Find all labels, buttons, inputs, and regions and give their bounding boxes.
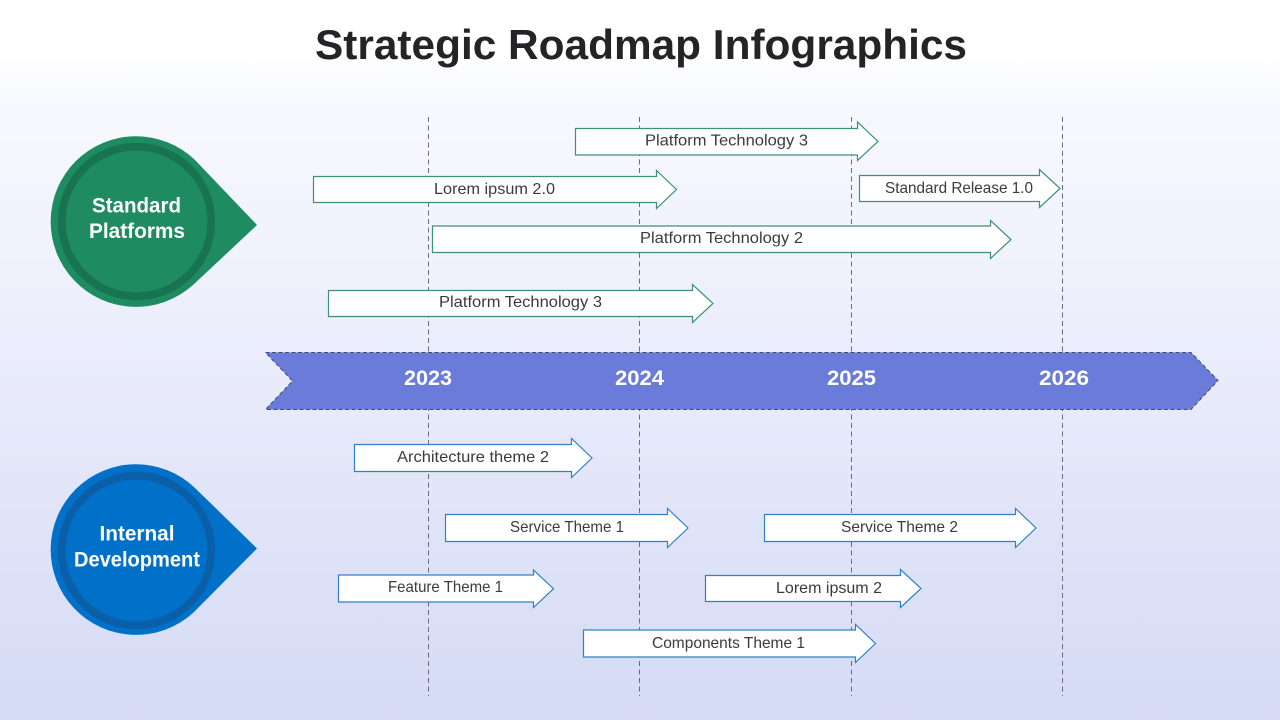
arrow: Platform Technology 3 (top) [576, 122, 878, 160]
arrow: Service Theme 1: Service Theme 1 [510, 519, 624, 536]
badge drop shape [51, 136, 257, 307]
arrow: Standard Release 1.0: Standard Release 1.0 [885, 180, 1033, 197]
arrow: Lorem ipsum 2.0: Lorem ipsum 2.0 [434, 181, 555, 198]
arrow: Platform Technology 3 (top): Platform Technology 3 [645, 132, 808, 150]
arrow: Feature Theme 1 [338, 570, 554, 608]
arrow: Service Theme 1 [446, 508, 688, 548]
badge label: Internal [100, 523, 174, 546]
badge label: Development [74, 549, 200, 572]
badge label [89, 194, 185, 243]
year 2025: 2025 [827, 367, 876, 390]
arrow: Platform Technology 2 [432, 220, 1011, 258]
arrow: Platform Technology 2: Platform Technology 2 [640, 230, 803, 247]
arrow: Lorem ipsum 2.0 [314, 170, 676, 208]
arrow: Platform Technology 3 (lower): Platform Technology 3 [439, 294, 602, 311]
year 2026: 2026 [1039, 367, 1089, 390]
badge label: Platforms [89, 220, 185, 243]
badge inner ring [62, 476, 211, 625]
title: Strategic Roadmap Infographics [315, 21, 967, 68]
badge inner ring [62, 147, 211, 296]
badge label: Standard [92, 194, 181, 218]
badge drop shape [51, 464, 257, 635]
arrow: Lorem ipsum 2 [706, 570, 921, 608]
arrow: Components Theme 1: Components Theme 1 [652, 635, 805, 652]
arrow: Standard Release 1.0 [860, 170, 1060, 208]
arrow: Components Theme 1 [584, 624, 876, 662]
arrow: Platform Technology 3 (lower) [328, 284, 713, 322]
arrow: Feature Theme 1: Feature Theme 1 [388, 579, 503, 596]
arrow: Service Theme 2: Service Theme 2 [841, 519, 958, 536]
band arrow shape [266, 352, 1218, 410]
panel: standard platforms badge [51, 136, 257, 307]
panel: internal development badge [51, 464, 257, 635]
arrow: Service Theme 2 [764, 508, 1036, 548]
year 2023: 2023 [404, 367, 452, 390]
arrow: Architecture theme 2: Architecture theme 2 [397, 449, 549, 466]
year gridlines [428, 117, 1062, 696]
arrow: Lorem ipsum 2: Lorem ipsum 2 [776, 580, 882, 597]
timeline band [266, 352, 1218, 410]
year 2024: 2024 [615, 367, 664, 390]
badge label [74, 523, 200, 572]
arrow: Architecture theme 2 [354, 438, 592, 478]
